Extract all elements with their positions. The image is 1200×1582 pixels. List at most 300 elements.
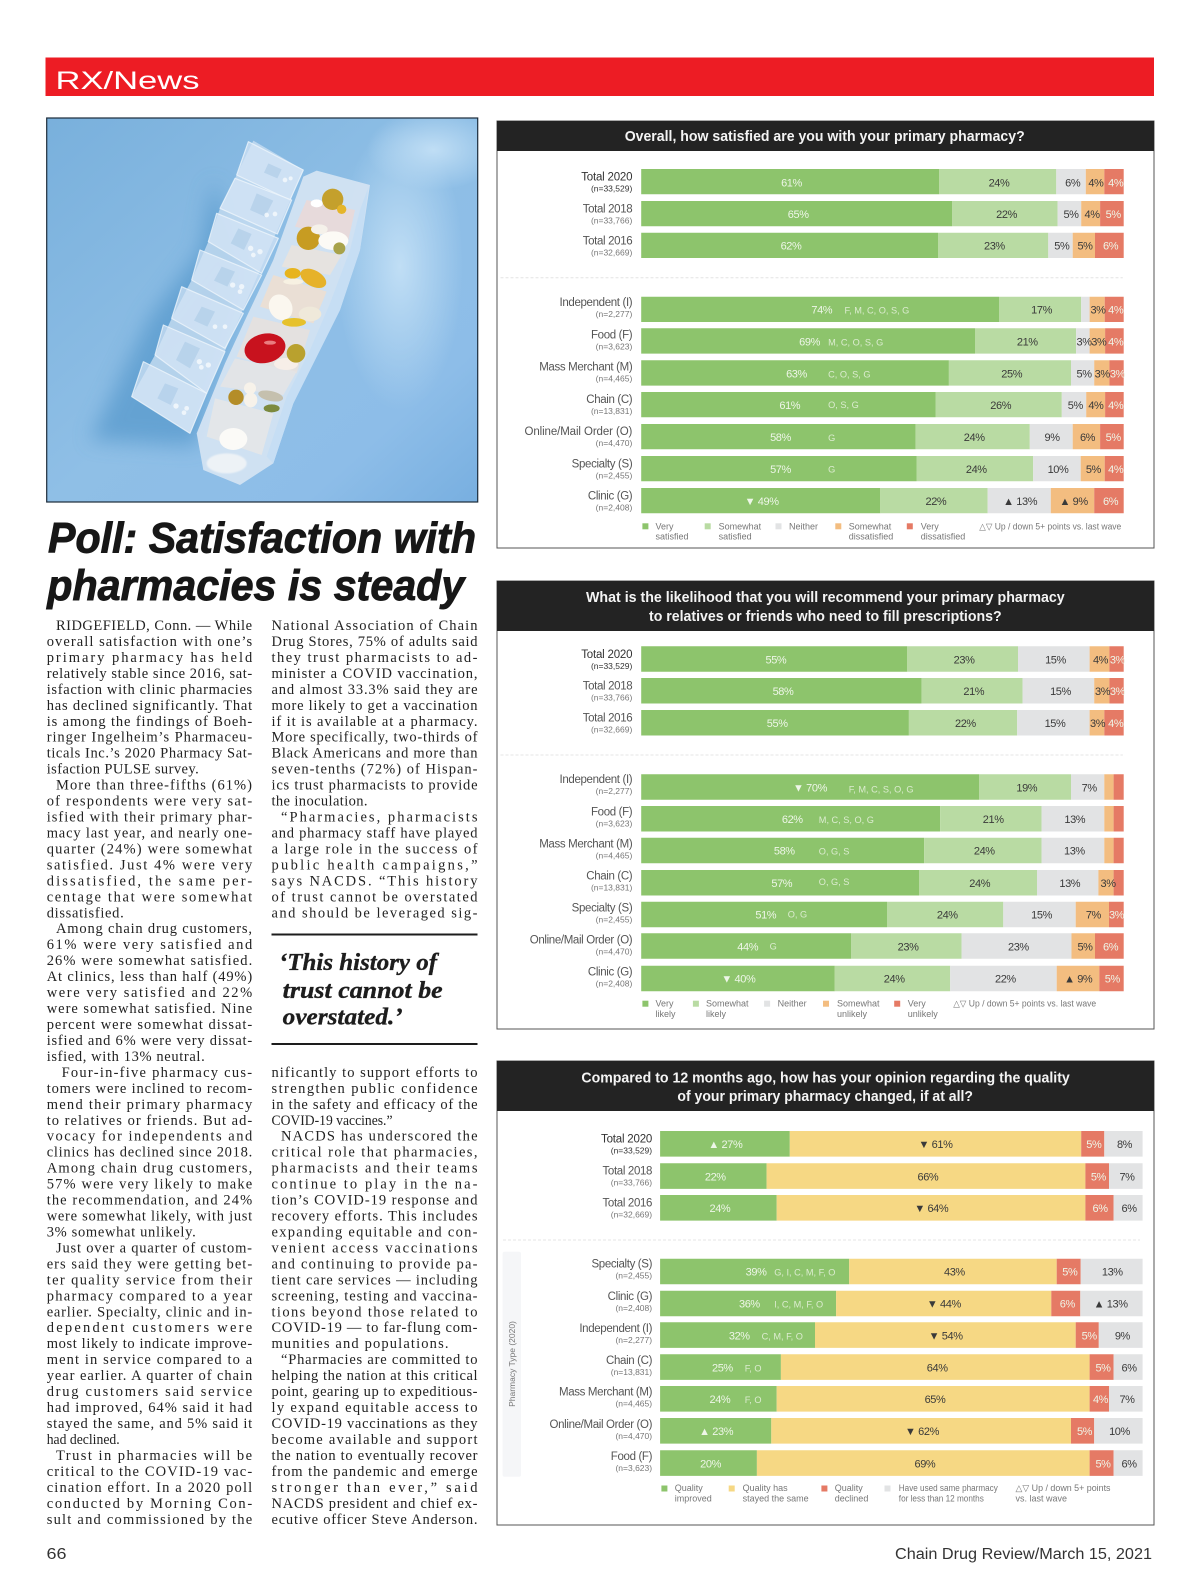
row: Specialty: 3% <box>1109 910 1125 922</box>
row: Mass Merchant: Mass Merchant (M) <box>539 838 633 850</box>
row: Mass Merchant <box>559 1386 1143 1412</box>
row: Independent: (n=2,277) <box>596 309 632 319</box>
row: Clinic: ▼ 44% <box>927 1299 961 1311</box>
pull quote: trust cannot be <box>283 978 443 1004</box>
legend: Very <box>908 999 926 1009</box>
legend: Neither <box>789 521 818 531</box>
row: Total 2020: Total 2020 <box>581 172 632 184</box>
row: Chain: (n=13,831) <box>611 1367 652 1377</box>
article column 1: More than three-fifths (61%) <box>56 778 252 794</box>
legend: △▽ Up / down 5+ points vs. last wave <box>953 999 1096 1009</box>
row: Mass Merchant <box>539 360 1126 386</box>
headline: pharmacies is steady <box>46 562 466 610</box>
legend <box>642 999 1096 1019</box>
row: Total 2020: (n=33,529) <box>611 1146 652 1156</box>
panel: likelihood to recommend chart <box>497 581 1154 1029</box>
article column 1: mend their primary pharmacy <box>47 1097 253 1113</box>
article column 2 upper: more likely to get a vaccination <box>272 698 478 714</box>
article column 2 upper: and almost 33.3% said they are <box>272 682 478 698</box>
legend <box>642 521 1121 542</box>
row: Mass Merchant: 4% <box>1093 1394 1109 1406</box>
article column 2 lower: strengthen public confidence <box>272 1081 478 1097</box>
row: Total 2020: 15% <box>1045 654 1067 666</box>
row: Total 2016: 5% <box>1077 241 1093 253</box>
row: Total 2018: 22% <box>705 1171 726 1183</box>
row: Online/Mail Order: 5% <box>1106 432 1121 444</box>
row: Total 2018: (n=33,766) <box>591 216 632 226</box>
article column 1: Among chain drug customers, <box>47 1161 252 1177</box>
row: Chain: Chain (C) <box>606 1355 653 1367</box>
row: Total 2020: Total 2020 <box>581 649 632 661</box>
row: Food: 5% <box>1095 1458 1111 1470</box>
legend: Quality <box>675 1483 703 1493</box>
row: Total 2016: 6% <box>1093 1203 1108 1215</box>
row: Total 2020: (n=33,529) <box>591 661 632 671</box>
legend: likely <box>656 1009 676 1019</box>
row: Food: 69% <box>799 336 821 348</box>
row: Food: 3% <box>1091 336 1107 348</box>
row: Specialty: 4% <box>1108 464 1124 476</box>
row: Total 2016: 6% <box>1103 241 1119 253</box>
row: Specialty <box>591 1258 1143 1284</box>
row: Online/Mail Order: ▼ 62% <box>905 1426 940 1438</box>
row: Food: M, C, O, S, G <box>828 337 883 347</box>
article column 2 upper: “Pharmacies, pharmacists <box>281 810 478 826</box>
article column 1: overall satisfaction with one’s <box>47 634 253 650</box>
row: Online/Mail Order <box>550 1418 1143 1444</box>
article column 2 upper: minister a COVID vaccination, <box>272 666 478 682</box>
legend: Somewhat <box>719 521 762 531</box>
article column 1: earlier. Specialty, clinic and in- <box>47 1304 252 1320</box>
article column 1: primary pharmacy has held <box>47 650 253 666</box>
legend: satisfied <box>656 532 689 542</box>
article column 1: cination effort. In a 2020 poll <box>47 1480 252 1496</box>
row: Clinic <box>588 966 1124 991</box>
row: Food: M, C, S, O, G <box>819 815 874 825</box>
row: Mass Merchant: 58% <box>774 846 795 858</box>
row: Total 2016: 62% <box>781 241 802 253</box>
row: Total 2018: 22% <box>996 209 1018 221</box>
row: Total 2016: ▼ 64% <box>914 1203 949 1215</box>
legend: unlikely <box>908 1009 938 1019</box>
row: Total 2018: (n=33,766) <box>591 693 632 703</box>
row: Online/Mail Order: 6% <box>1080 432 1096 444</box>
row: Chain: 5% <box>1095 1362 1111 1374</box>
row: Mass Merchant: 65% <box>925 1394 946 1406</box>
row: Specialty <box>572 456 1124 481</box>
legend: Quality has <box>743 1483 788 1493</box>
article column 2 lower: tient care services — including <box>272 1272 478 1288</box>
row: Mass Merchant: 13% <box>1064 846 1085 858</box>
row: Clinic: 6% <box>1103 496 1119 508</box>
row: Total 2018: 5% <box>1063 209 1079 221</box>
row: Online/Mail Order: 24% <box>964 432 985 444</box>
row: Chain: Chain (C) <box>586 394 633 406</box>
row: Total 2018 <box>583 678 1126 704</box>
row: Chain: 26% <box>990 400 1012 412</box>
legend: △▽ Up / down 5+ points vs. last wave <box>979 521 1121 531</box>
row: Independent: C, M, F, O <box>762 1331 803 1341</box>
row: Specialty: 24% <box>937 910 958 922</box>
article column 1: quarter (24%) were somewhat <box>47 841 252 857</box>
headline: Poll: Satisfaction with <box>48 514 476 562</box>
row: Food: Food (F) <box>591 806 633 818</box>
legend: unlikely <box>837 1009 868 1019</box>
article column 1: 61% were very satisfied and <box>47 937 253 953</box>
row: Independent: 3% <box>1090 305 1106 317</box>
row: Total 2016: 5% <box>1054 241 1070 253</box>
chart title: What is the likelihood that you will recommend your primary pharmacy <box>586 589 1065 606</box>
row: Clinic <box>608 1291 1143 1316</box>
row: Total 2018 <box>603 1163 1143 1189</box>
row: Specialty: 43% <box>944 1267 965 1279</box>
article column 1: clinics has declined since 2018. <box>47 1145 252 1161</box>
side label: Pharmacy Type <box>503 1252 521 1477</box>
row: Total 2020: (n=33,529) <box>591 184 632 194</box>
article column 2 upper: a large role in the success of <box>272 841 478 857</box>
row: Total 2018: 3% <box>1095 686 1111 698</box>
article column 2 lower: and continuing to provide pa- <box>272 1256 478 1272</box>
row: Total 2016: (n=32,669) <box>591 725 632 735</box>
row: Chain: (n=13,831) <box>591 883 632 893</box>
article column 1: isfied, with 13% neutral. <box>47 1049 205 1065</box>
legend: Very <box>656 521 674 531</box>
article column 2 lower: critical role that pharmacies, <box>272 1145 478 1161</box>
row: Total 2020: ▲ 27% <box>708 1139 743 1151</box>
row: Chain: 13% <box>1059 878 1081 890</box>
row: Food: 3% <box>1077 336 1092 348</box>
article column 2 lower: stronger than ever,” said <box>272 1480 478 1496</box>
row: Clinic: ▲ 9% <box>1064 974 1093 986</box>
article column 2 lower: tion’s COVID-19 response and <box>272 1193 478 1209</box>
row: Online/Mail Order: 44% <box>737 941 759 953</box>
row: Specialty: (n=2,455) <box>596 470 632 480</box>
row: Food: 4% <box>1108 336 1124 348</box>
row: Online/Mail Order: (n=4,470) <box>615 1431 652 1441</box>
row: Specialty: 51% <box>755 910 777 922</box>
row: Total 2016 <box>603 1195 1143 1221</box>
row: Specialty: 39% <box>746 1267 767 1279</box>
row: Online/Mail Order: Online/Mail Order (O) <box>530 935 633 947</box>
row: Total 2016: 15% <box>1045 718 1066 730</box>
article column 1: were somewhat likely, with just <box>47 1208 252 1224</box>
row: Independent: F, M, C, O, S, G <box>844 306 909 316</box>
row: Chain: 64% <box>927 1362 948 1374</box>
article column 2 upper: of trust cannot be overstated <box>272 889 478 905</box>
row: Chain: 5% <box>1068 400 1083 412</box>
row: Total 2016: 4% <box>1108 718 1124 730</box>
row: Total 2016: 24% <box>709 1203 731 1215</box>
row: Independent: 17% <box>1031 305 1053 317</box>
article column 2 lower: nificantly to support efforts to <box>272 1065 478 1081</box>
article column 2 upper: More specifically, two-thirds of <box>272 730 478 746</box>
row: Clinic: 24% <box>884 974 905 986</box>
row: Chain <box>606 1354 1143 1380</box>
article column 1 <box>47 618 253 1528</box>
article column 1: stayed the same, and 5% said it <box>47 1416 252 1432</box>
article column 1: Among chain drug customers, <box>56 921 252 937</box>
legend: Very <box>656 999 674 1009</box>
row: Chain: 4% <box>1108 400 1124 412</box>
pull quote: overstated.’ <box>283 1005 403 1031</box>
article column 1: satisfied. Just 4% were very <box>47 857 253 873</box>
row: Online/Mail Order <box>530 933 1124 959</box>
row: Mass Merchant: 25% <box>1001 368 1023 380</box>
row: Independent: F, M, C, S, O, G <box>849 784 914 794</box>
article column 2 upper: says NACDS. “This history <box>272 873 478 889</box>
article column 1: of respondents were very sat- <box>47 794 252 810</box>
article column 1: isfied and 6% were very dissat- <box>47 1033 252 1049</box>
row: Independent: 32% <box>729 1330 750 1342</box>
article column 1: dissatisfied. <box>47 905 124 921</box>
row: Independent: Independent (I) <box>579 1323 653 1335</box>
row: Clinic: 36% <box>739 1299 760 1311</box>
row: Mass Merchant: 24% <box>974 846 995 858</box>
row: Chain: 6% <box>1122 1362 1137 1374</box>
row: Independent: Independent (I) <box>560 774 633 786</box>
row: Online/Mail Order: 23% <box>898 941 919 953</box>
row: Chain: (n=13,831) <box>591 406 632 416</box>
row: Chain: O, G, S <box>819 877 849 887</box>
row: Food: 69% <box>914 1458 936 1470</box>
article column 2 lower: COVID-19 vaccines.” <box>272 1113 392 1129</box>
row: Online/Mail Order: 9% <box>1045 432 1060 444</box>
headline <box>46 514 476 610</box>
panel: quality change chart <box>497 1061 1154 1525</box>
row: Specialty: O, G <box>788 910 807 920</box>
row: Specialty: (n=2,455) <box>615 1270 652 1280</box>
article column 2 lower: NACDS has underscored the <box>281 1129 478 1145</box>
row: Mass Merchant: (n=4,465) <box>615 1399 652 1409</box>
row: Food: (n=3,623) <box>596 341 632 351</box>
row: Mass Merchant: 24% <box>709 1394 731 1406</box>
row: Food: 20% <box>700 1458 722 1470</box>
row: Online/Mail Order: 5% <box>1077 1426 1093 1438</box>
page number: 66 <box>46 1546 66 1563</box>
row: Clinic: ▲ 9% <box>1059 496 1088 508</box>
header band <box>46 58 1154 96</box>
row: Chain <box>586 392 1124 417</box>
chart title <box>497 581 1154 631</box>
article column 1: Trust in pharmacies will be <box>56 1448 252 1464</box>
row: Mass Merchant: (n=4,465) <box>596 850 632 860</box>
row: Clinic: 5% <box>1105 974 1120 986</box>
legend: for less than 12 months <box>899 1493 984 1503</box>
article column 1: has declined significantly. That <box>47 698 252 714</box>
article column 1: Just over a quarter of custom- <box>56 1240 252 1256</box>
row: Specialty: 7% <box>1086 910 1102 922</box>
legend: Have used same pharmacy <box>899 1483 998 1493</box>
row: Online/Mail Order: 23% <box>1008 941 1029 953</box>
row: Clinic: ▲ 13% <box>1094 1299 1128 1311</box>
row: Online/Mail Order: (n=4,470) <box>596 947 632 957</box>
article column 2 upper: National Association of Chain <box>272 618 478 634</box>
row: Online/Mail Order: 6% <box>1103 941 1119 953</box>
row: Total 2020: 4% <box>1108 178 1124 190</box>
article column 2 lower: COVID-19 vaccinations as they <box>272 1416 478 1432</box>
row: Online/Mail Order: 58% <box>770 432 792 444</box>
article column 2 lower: munities and populations. <box>272 1336 448 1352</box>
row: Online/Mail Order: 10% <box>1109 1426 1131 1438</box>
article column 1: centage that were somewhat <box>47 889 252 905</box>
row: Clinic: (n=2,408) <box>615 1303 652 1313</box>
row: Total 2016: 23% <box>984 241 1005 253</box>
row: Clinic <box>588 488 1124 513</box>
chart title: Overall, how satisfied are you with your primary pharmacy? <box>625 128 1025 145</box>
side label: Pharmacy Type: Pharmacy Type (2020) <box>507 1321 517 1407</box>
row: Independent <box>560 297 1124 322</box>
article column 1: sult and commissioned by the <box>47 1512 252 1528</box>
article column 2 lower: pharmacists and their teams <box>272 1161 478 1177</box>
legend: Neither <box>778 999 807 1009</box>
row: Total 2018: Total 2018 <box>603 1165 652 1177</box>
article column 1: isfaction PULSE survey. <box>47 762 199 778</box>
row: Food: 21% <box>983 814 1004 826</box>
article column 2 lower <box>272 1065 478 1528</box>
row: Chain: 3% <box>1101 878 1116 890</box>
article column 1: isfied with their primary phar- <box>47 810 252 826</box>
row: Chain: F, O <box>745 1363 762 1373</box>
article column 2 upper: and should be leveraged sig- <box>272 905 478 921</box>
row: Chain <box>586 870 1124 896</box>
article column 1: RIDGEFIELD, Conn. — While <box>56 618 252 634</box>
row: Total 2018: 58% <box>773 686 794 698</box>
legend: Quality <box>835 1483 863 1493</box>
row: Mass Merchant: F, O <box>745 1395 762 1405</box>
row: Total 2020: 5% <box>1086 1139 1102 1151</box>
article column 1: At clinics, less than half (49%) <box>47 969 252 985</box>
pull quote: ‘This history of <box>279 950 439 976</box>
legend: dissatisfied <box>849 532 893 542</box>
row: Total 2016: 22% <box>955 718 976 730</box>
article column 1: ter quality service from their <box>47 1272 252 1288</box>
article column 2 lower: continue to play in the na- <box>272 1177 478 1193</box>
legend: stayed the same <box>743 1493 809 1503</box>
article column 1: the recommendation, and 24% <box>47 1193 252 1209</box>
row: Independent: Independent (I) <box>560 297 633 309</box>
article column 1: vocacy for independents and <box>47 1129 253 1145</box>
row: Specialty: 5% <box>1062 1267 1078 1279</box>
row: Total 2018: 66% <box>917 1171 939 1183</box>
article column 1: percent were somewhat dissat- <box>47 1017 252 1033</box>
article column 2 lower: NACDS president and chief ex- <box>272 1496 478 1512</box>
row: Chain: Chain (C) <box>586 871 633 883</box>
article column 2 upper: Drug Stores, 75% of adults said <box>272 634 478 650</box>
row: Chain: 25% <box>712 1362 733 1374</box>
article column 1: most likely to indicate improve- <box>47 1336 252 1352</box>
row: Total 2018: 7% <box>1119 1171 1135 1183</box>
row: Independent: ▼ 70% <box>793 782 828 794</box>
row: Total 2016: 6% <box>1122 1203 1137 1215</box>
row: Food: Food (F) <box>611 1451 653 1463</box>
row: Total 2016: (n=32,669) <box>611 1210 652 1220</box>
row: Chain: 24% <box>969 878 991 890</box>
row: Mass Merchant <box>539 838 1124 863</box>
row: Clinic: (n=2,408) <box>596 503 632 513</box>
article column 2 lower: ly expand equitable access to <box>272 1400 478 1416</box>
row: Online/Mail Order: 5% <box>1077 941 1093 953</box>
row: Total 2020: 24% <box>989 178 1010 190</box>
row: Mass Merchant: Mass Merchant (M) <box>539 362 633 374</box>
row: Total 2018: 15% <box>1050 686 1072 698</box>
row: Mass Merchant: 63% <box>786 368 808 380</box>
legend: Somewhat <box>837 999 880 1009</box>
article column 2 lower: the nation to eventually recover <box>272 1448 478 1464</box>
chart title <box>497 121 1154 151</box>
chart title <box>497 1061 1154 1111</box>
article column 1: relatively stable since 2016, sat- <box>47 666 252 682</box>
row: Total 2020: 4% <box>1093 654 1109 666</box>
article column 1: had improved, 64% said it had <box>47 1400 253 1416</box>
legend <box>661 1483 1111 1503</box>
article column 2 lower: recovery efforts. This includes <box>272 1208 478 1224</box>
row: Food <box>591 806 1124 832</box>
row: Total 2020: 61% <box>781 178 803 190</box>
row: Total 2020: Total 2020 <box>601 1134 652 1146</box>
pull quote <box>272 934 478 1045</box>
row: Total 2018: 65% <box>788 209 809 221</box>
legend: △▽ Up / down 5+ points <box>1016 1483 1111 1493</box>
row: Clinic: Clinic (G) <box>588 491 633 503</box>
row: Food <box>591 328 1124 354</box>
row: Specialty: (n=2,455) <box>596 914 632 924</box>
row: Independent <box>560 774 1124 800</box>
row: Independent: (n=2,277) <box>596 786 632 796</box>
row: Mass Merchant: O, G, S <box>819 847 849 857</box>
article column 1: macy last year, and nearly one- <box>47 826 252 842</box>
chart title: Compared to 12 months ago, how has your opinion regarding the quality <box>581 1069 1070 1086</box>
row: Total 2018: 4% <box>1085 209 1100 221</box>
row: Independent: 74% <box>811 305 833 317</box>
row: Chain: 57% <box>771 878 793 890</box>
article column 1: critical to the COVID-19 vac- <box>47 1464 252 1480</box>
row: Specialty: Specialty (S) <box>572 458 633 470</box>
article column 2 lower: ecutive officer Steve Anderson. <box>272 1512 478 1528</box>
row: Total 2020 <box>581 646 1126 672</box>
photo: pill organizer <box>47 110 500 502</box>
row: Total 2018: 5% <box>1091 1171 1107 1183</box>
row: Mass Merchant: C, O, S, G <box>828 369 870 379</box>
article column 2 lower: venient access vaccinations <box>272 1240 478 1256</box>
article column 2 upper: and pharmacy staff have played <box>272 826 478 842</box>
row: Mass Merchant: (n=4,465) <box>596 374 632 384</box>
row: Total 2020: 4% <box>1088 178 1104 190</box>
publication footer: Chain Drug Review/March 15, 2021 <box>895 1546 1152 1563</box>
row: Chain: O, S, G <box>828 400 859 410</box>
row: Specialty: 15% <box>1031 910 1053 922</box>
row: Clinic: ▼ 40% <box>721 974 756 986</box>
legend: likely <box>706 1009 727 1019</box>
row: Online/Mail Order: G <box>828 433 835 443</box>
row: Mass Merchant: 5% <box>1077 368 1092 380</box>
article column 2 lower: point, gearing up to expeditious- <box>272 1384 478 1400</box>
article column 1: 3% somewhat unlikely. <box>47 1224 196 1240</box>
row: Total 2020: 8% <box>1117 1139 1133 1151</box>
legend: vs. last wave <box>1016 1493 1067 1503</box>
row: Independent: 9% <box>1115 1330 1131 1342</box>
row: Food <box>611 1450 1143 1476</box>
row: Online/Mail Order: G <box>770 941 777 951</box>
row: Food: (n=3,623) <box>615 1463 652 1473</box>
row: Total 2020 <box>581 169 1124 194</box>
row: Specialty: 57% <box>770 464 792 476</box>
article column 2 upper: if it is available at a pharmacy. <box>272 714 478 730</box>
row: Food: 13% <box>1064 814 1086 826</box>
row: Chain: 4% <box>1088 400 1104 412</box>
row: Online/Mail Order <box>524 424 1124 449</box>
row: Clinic: 22% <box>995 974 1016 986</box>
row: Total 2016: Total 2016 <box>583 235 632 247</box>
